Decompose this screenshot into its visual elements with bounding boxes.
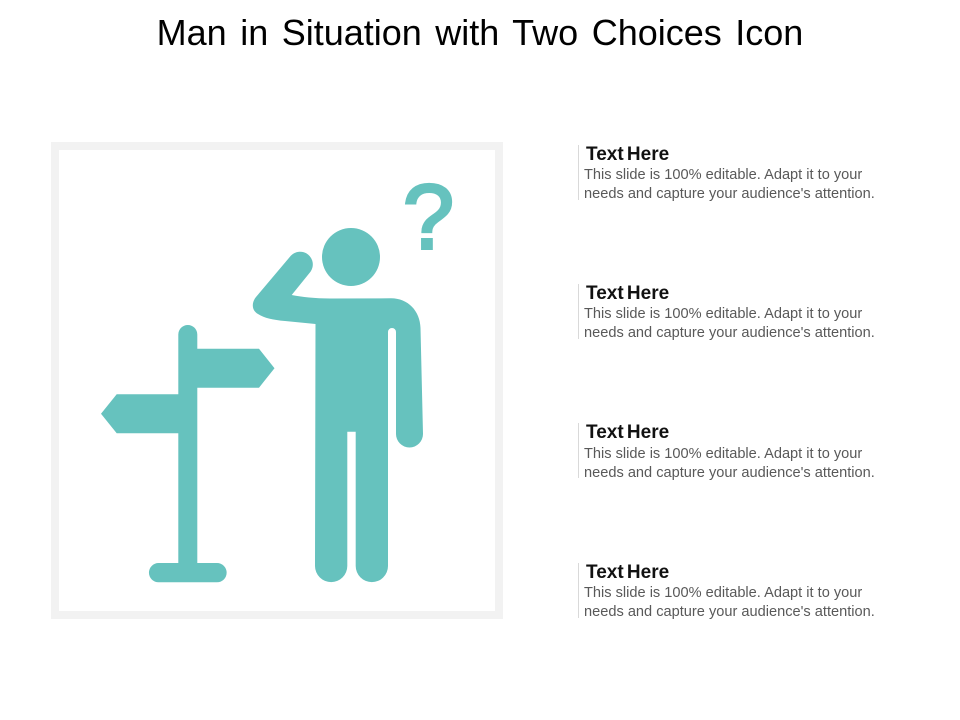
icon: signpost [101, 325, 274, 582]
text block 2: needs and capture your audience's attention. [584, 325, 875, 341]
text block 2 [578, 283, 875, 341]
text block 2: This slide is 100% editable. Adapt it to your [584, 306, 862, 322]
text block 4 [578, 562, 875, 620]
icon: man scratching head [253, 228, 423, 582]
text block 3: needs and capture your audience's attention. [584, 465, 875, 481]
text block 4: needs and capture your audience's attention. [584, 604, 875, 620]
text block 4: This slide is 100% editable. Adapt it to your [584, 585, 862, 601]
icon: question mark: ? [403, 166, 454, 268]
text block 3: Text Here [586, 422, 669, 443]
title: Man in Situation with Two Choices Icon [157, 12, 803, 53]
text block 2: Text Here [586, 283, 669, 304]
text block 4: Text Here [586, 562, 669, 583]
text block 1 [578, 144, 875, 202]
text block 3 [578, 422, 875, 481]
text block 3: This slide is 100% editable. Adapt it to your [584, 446, 862, 462]
text block 1: Text Here [586, 144, 669, 165]
panel: illustration frame [51, 142, 503, 619]
text block 1: This slide is 100% editable. Adapt it to your [584, 167, 862, 183]
text block 1: needs and capture your audience's attention. [584, 186, 875, 202]
